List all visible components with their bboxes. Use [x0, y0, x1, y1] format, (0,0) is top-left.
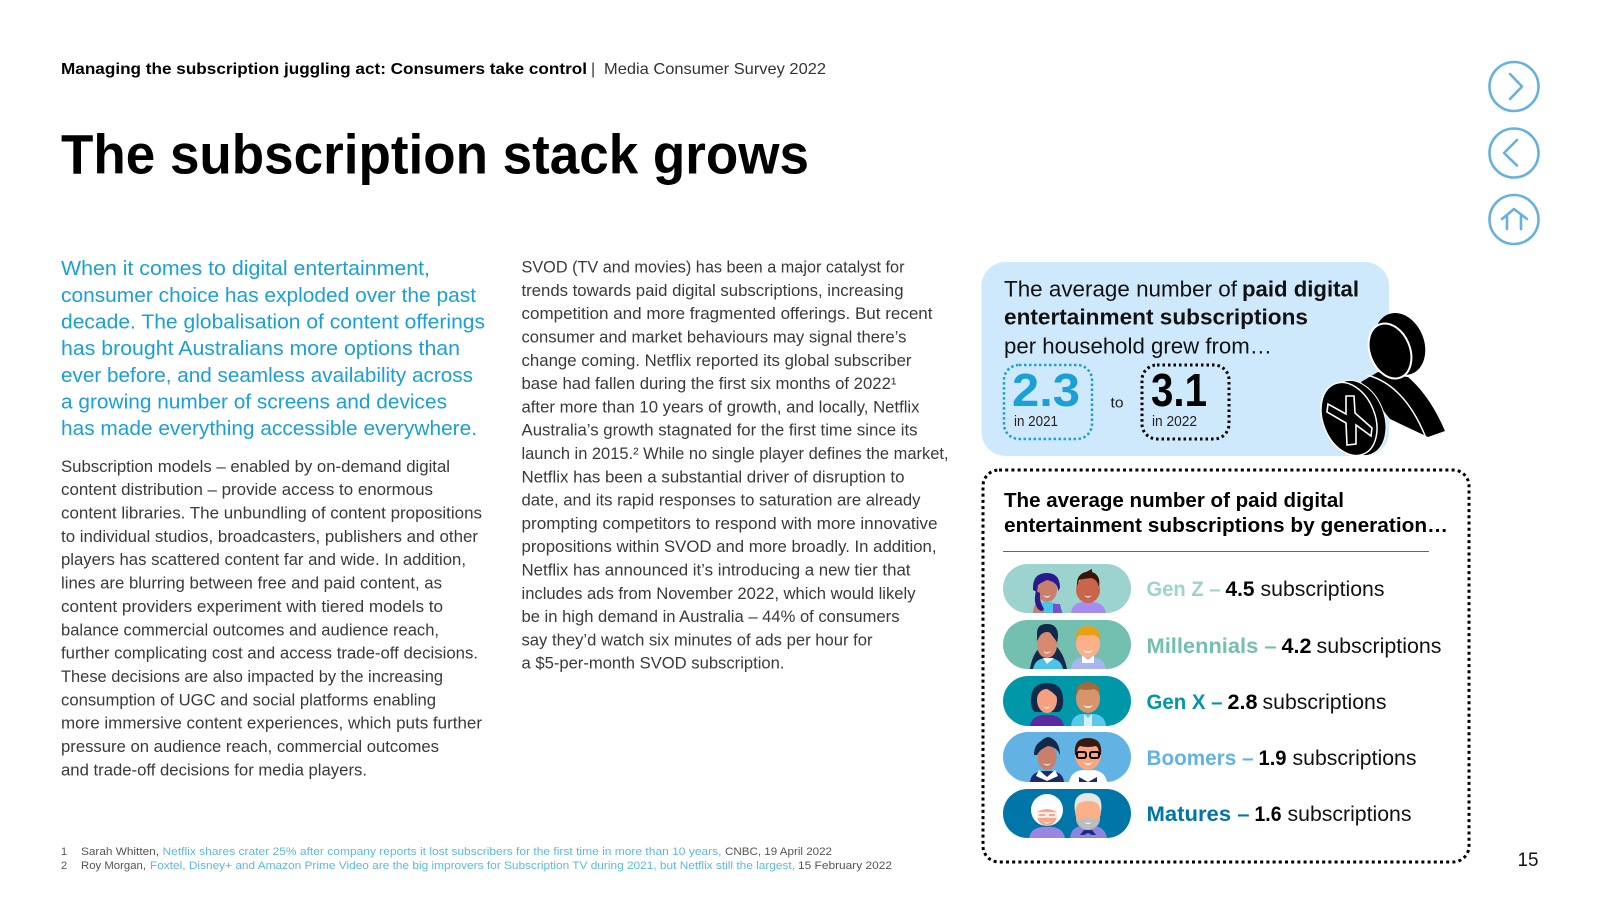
- generation row: Millennials: subscriptions: [1316, 635, 1442, 658]
- icon: next arrow: [1490, 62, 1538, 111]
- middle body text: trends towards paid digital subscriptions, increasing: [522, 282, 904, 300]
- header line: Media Consumer Survey 2022: [604, 61, 826, 78]
- header line: Managing the subscription juggling act: Consumers take control: [61, 61, 587, 78]
- generation row: Millennials: [1146, 635, 1442, 658]
- left body text: content distribution – provide access to enormous: [61, 481, 433, 499]
- stat: 3.1 in 2022: 3.1: [1151, 364, 1207, 416]
- middle body text: consumer and market behaviours may signal there’s: [522, 329, 906, 347]
- stat: 2.3 in 2021: 2.3: [1012, 364, 1080, 416]
- generation row: Gen Z: 4.5: [1226, 578, 1255, 601]
- left body text: players has scattered content far and wide. In addition,: [61, 551, 466, 569]
- connector text: to: [1110, 396, 1124, 412]
- page number: 15: [1518, 850, 1538, 871]
- panel heading: entertainment subscriptions by generation…: [1004, 514, 1448, 537]
- middle body text: [522, 259, 948, 673]
- generation row: Millennials: 4.2: [1282, 635, 1312, 658]
- stat: 3.1 in 2022: [1142, 364, 1229, 439]
- middle body text: SVOD (TV and movies) has been a major catalyst for: [522, 259, 905, 277]
- generation row: Boomers: subscriptions: [1292, 747, 1416, 770]
- left body text: consumption of UGC and social platforms enabling: [61, 691, 436, 709]
- intro paragraph: has brought Australians more options than: [61, 337, 460, 360]
- intro paragraph: a growing number of screens and devices: [61, 390, 447, 414]
- navigation icons: [1490, 62, 1538, 244]
- intro paragraph: [61, 257, 485, 440]
- middle body text: say they’d watch six minutes of ads per hour for: [522, 631, 873, 649]
- generation row: Gen X: Gen X –: [1146, 691, 1223, 714]
- panel heading: The average number of paid digital: [1004, 489, 1344, 512]
- footnote 1: CNBC, 19 April 2022: [725, 846, 832, 858]
- stat: 3.1 in 2022: in 2022: [1152, 414, 1197, 430]
- generation row: Matures: 1.6: [1254, 803, 1282, 826]
- middle body text: base had fallen during the first six months of 2022¹: [522, 375, 897, 393]
- panel: household subscriptions: [982, 262, 1389, 456]
- intro paragraph: consumer choice has exploded over the past: [61, 284, 476, 307]
- intro paragraph: decade. The globalisation of content offerings: [61, 310, 485, 334]
- middle body text: Australia’s growth stagnated for the first time since its: [522, 422, 918, 440]
- left body text: balance commercial outcomes and audience reach,: [61, 621, 439, 639]
- left body text: pressure on audience reach, commercial outcomes: [61, 738, 439, 756]
- footnote 2: Foxtel, Disney+ and Amazon Prime Video are the big improvers for Subscription TV during 2021, but Netflix still the largest,: [150, 860, 795, 872]
- generation row: Gen X: subscriptions: [1262, 691, 1386, 714]
- left body text: and trade-off decisions for media players.: [61, 761, 367, 779]
- middle body text: launch in 2015.² While no single player defines the market,: [522, 445, 948, 463]
- pill: Millennials people: [1003, 620, 1131, 669]
- middle body text: competition and more fragmented offerings. But recent: [522, 305, 933, 323]
- middle body text: propositions within SVOD and more broadly. In addition,: [522, 538, 936, 556]
- generation row: Matures: subscriptions: [1288, 803, 1412, 826]
- header line: |: [591, 61, 595, 78]
- middle body text: Netflix has announced it’s introducing a new tier that: [522, 562, 911, 580]
- pill: Gen Z people: [1003, 564, 1131, 613]
- middle body text: Netflix has been a substantial driver of disruption to: [522, 468, 904, 486]
- panel heading: [1004, 489, 1448, 537]
- footnote 1: Netflix shares crater 25% after company reports it lost subscribers for the first time in more than 10 years,: [162, 846, 722, 858]
- panel: subscriptions by generation: [983, 470, 1469, 862]
- intro paragraph: has made everything accessible everywhere.: [61, 417, 477, 440]
- panel heading: paid digital: [1242, 276, 1359, 302]
- intro paragraph: ever before, and seamless availability across: [61, 364, 473, 387]
- middle body text: change coming. Netflix reported its global subscriber: [522, 352, 912, 370]
- title: The subscription stack grows: [61, 122, 809, 186]
- footnote 2: Roy Morgan,: [81, 860, 146, 872]
- left body text: content providers experiment with tiered models to: [61, 598, 443, 616]
- pill: Gen X people: [1003, 676, 1131, 726]
- intro paragraph: When it comes to digital entertainment,: [61, 257, 430, 280]
- stat: 2.3 in 2021: in 2021: [1014, 414, 1058, 430]
- generation row: Gen X: [1146, 691, 1386, 714]
- footnotes: [61, 846, 892, 872]
- icon: home: [1490, 195, 1538, 244]
- middle body text: prompting competitors to respond with more innovative: [522, 515, 938, 533]
- stat: 2.3 in 2021: [1004, 364, 1092, 439]
- footnote 1: Sarah Whitten,: [81, 846, 159, 858]
- icon: person with plus badge: [1311, 305, 1445, 464]
- header line: [61, 61, 826, 78]
- left body text: to individual studios, broadcasters, publishers and other: [61, 528, 479, 546]
- generation row: Matures: [1146, 803, 1412, 826]
- generation row: Gen Z: subscriptions: [1260, 578, 1384, 601]
- left body text: further complicating cost and access trade-off decisions.: [61, 645, 478, 663]
- middle body text: a $5-per-month SVOD subscription.: [522, 655, 784, 673]
- left body text: Subscription models – enabled by on-demand digital: [61, 458, 450, 476]
- generation row: Boomers: Boomers –: [1146, 747, 1254, 770]
- generation row: Millennials: Millennials –: [1146, 635, 1277, 658]
- panel heading: [1004, 276, 1359, 358]
- generation row: Gen X: 2.8: [1228, 691, 1258, 714]
- icon: previous arrow: [1490, 128, 1538, 178]
- footnote 2: 2: [61, 860, 67, 872]
- middle body text: be in high demand in Australia – 44% of consumers: [522, 608, 900, 626]
- pill: Matures people: [1003, 789, 1131, 838]
- generation row: Gen Z: [1146, 578, 1384, 601]
- middle body text: includes ads from November 2022, which would likely: [522, 585, 916, 603]
- footnote 2: 15 February 2022: [798, 860, 892, 872]
- left body text: content libraries. The unbundling of content propositions: [61, 505, 482, 523]
- generation row: Boomers: [1146, 747, 1416, 770]
- footnote 1: 1: [61, 846, 67, 858]
- panel heading: The average number of: [1004, 276, 1238, 302]
- generation row: Matures: Matures –: [1146, 803, 1250, 826]
- left body text: These decisions are also impacted by the increasing: [61, 668, 443, 686]
- left body text: [61, 458, 483, 779]
- middle body text: after more than 10 years of growth, and locally, Netflix: [522, 398, 920, 416]
- middle body text: date, and its rapid responses to saturation are already: [522, 492, 921, 510]
- generation row: Boomers: 1.9: [1258, 747, 1286, 770]
- generation row: Gen Z: Gen Z –: [1146, 578, 1221, 601]
- panel heading: entertainment subscriptions: [1004, 304, 1308, 330]
- left body text: lines are blurring between free and paid content, as: [61, 575, 442, 593]
- left body text: more immersive content experiences, which puts further: [61, 715, 483, 733]
- pill: Boomers people: [1003, 732, 1131, 782]
- panel heading: per household grew from…: [1004, 334, 1272, 358]
- footnote 1: [61, 846, 832, 858]
